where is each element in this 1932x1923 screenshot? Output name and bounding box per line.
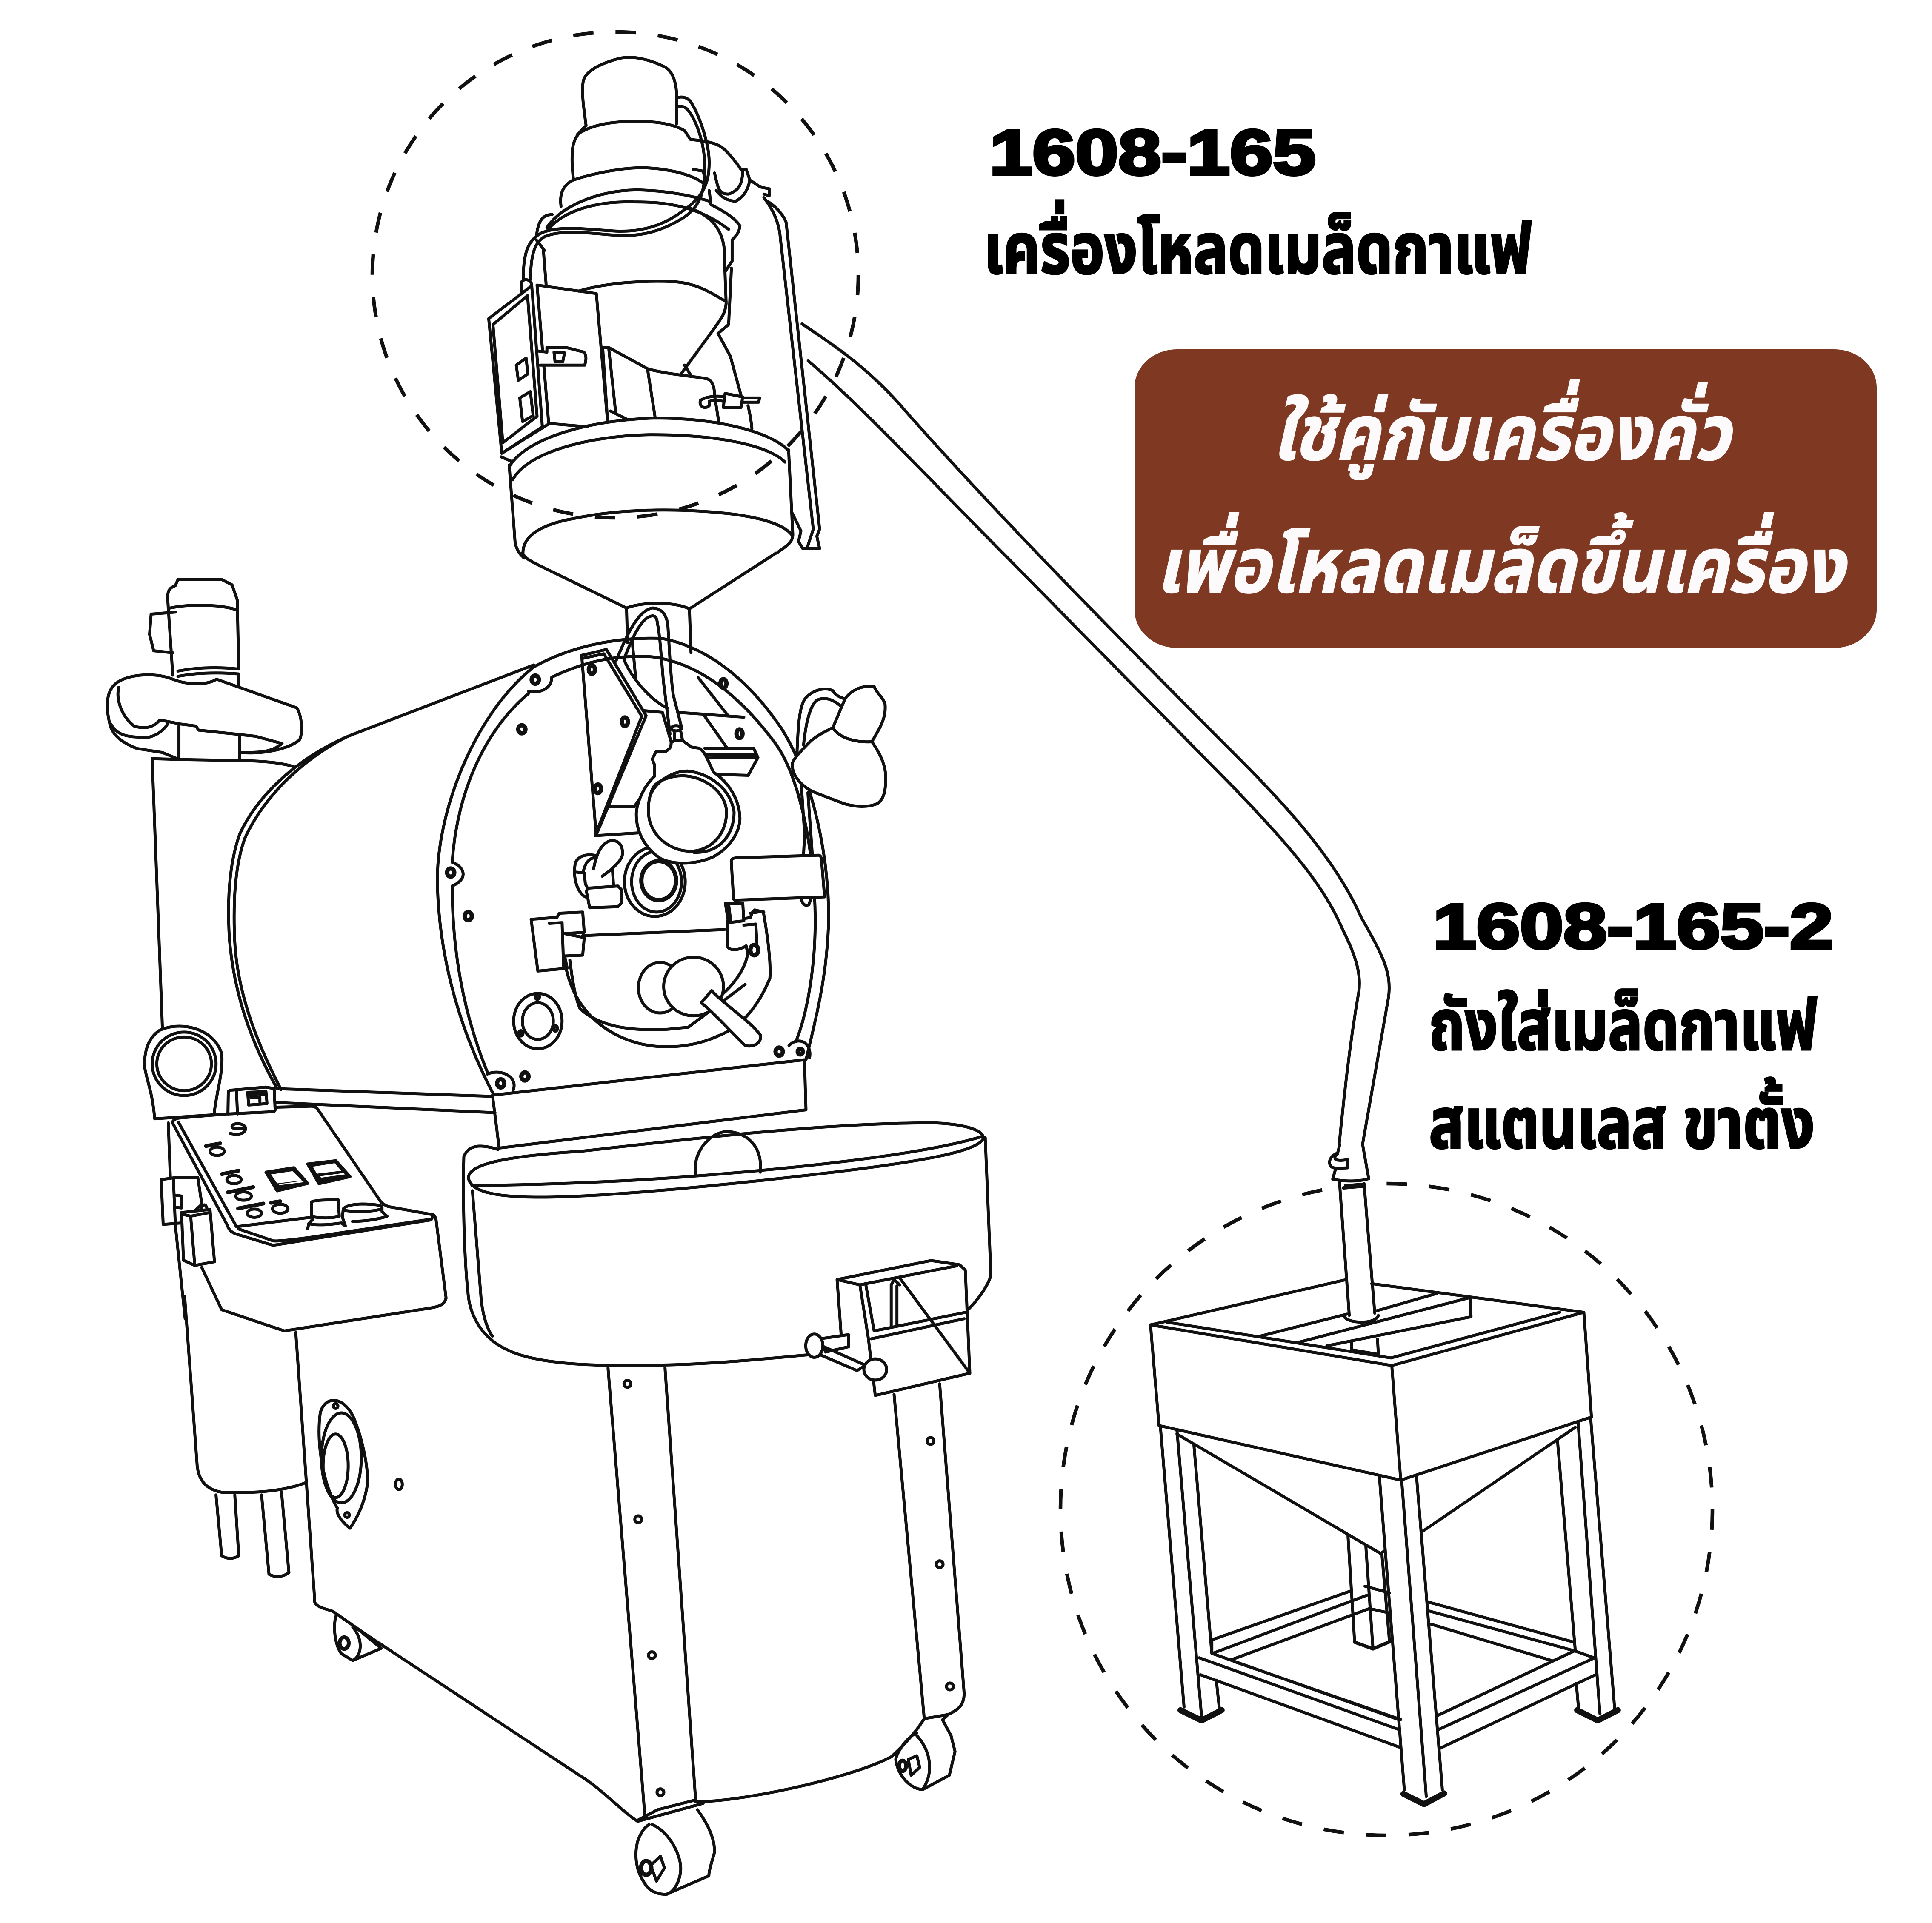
loader motor dome <box>583 57 677 126</box>
heading: loader name: เครื่องโหลดเมล็ดกาแฟ <box>984 200 1532 288</box>
base body <box>296 1332 924 1821</box>
drum back shell <box>229 665 534 1090</box>
control box switches <box>516 358 533 422</box>
rear caster <box>896 1715 955 1789</box>
dashed circle: stand detail <box>1060 1184 1712 1835</box>
tube into tank <box>1339 1181 1378 1322</box>
rear lamp stem <box>801 786 812 905</box>
illustration: bean loader <box>489 57 820 558</box>
rear leg plate <box>894 1384 964 1719</box>
sensor wire loop <box>616 608 682 734</box>
tank opening <box>1151 1280 1584 1358</box>
discharge chute <box>837 1261 970 1395</box>
loader valve knob <box>723 394 760 408</box>
door latch <box>726 903 764 942</box>
front caster <box>636 1800 714 1894</box>
illustration: drum door detail <box>574 608 886 955</box>
panel dials <box>206 1144 288 1218</box>
callout line 1: ใช้คู่กับเครื่องคั่ว <box>1272 380 1733 480</box>
cooling fan motor <box>149 579 239 685</box>
bar bracket <box>228 1087 275 1114</box>
bracket inner <box>237 1092 267 1114</box>
panel oval knob <box>342 1204 387 1221</box>
large viewing port <box>636 740 740 863</box>
screws <box>447 676 803 1087</box>
heading: part number loader: 1608-165 <box>989 117 1316 188</box>
heading: part number tank: 1608-165-2 <box>1433 890 1833 962</box>
illustration: roaster drum <box>107 553 829 1148</box>
chaff collector handle <box>107 675 302 759</box>
round gauge <box>144 1026 222 1119</box>
loader support strap <box>764 197 820 548</box>
loader lower casing <box>603 348 719 422</box>
pipe clamp <box>1329 1144 1369 1181</box>
illustration: machine base and cooling tray <box>185 1123 991 1894</box>
tank box <box>1151 1312 1592 1480</box>
door and latch rail <box>565 911 770 1047</box>
stand legs <box>1160 1417 1615 1797</box>
heading: tank description: สแตนเลส ขาตั้ง <box>1429 1077 1815 1163</box>
rear foot <box>1355 1642 1389 1649</box>
door knobs <box>638 962 682 1013</box>
cable box inner <box>182 1205 210 1265</box>
drum front plate <box>437 638 829 1094</box>
loader funnel rim <box>509 418 793 558</box>
lower frame <box>1199 1586 1596 1748</box>
illustration: bean tank stand <box>1151 1181 1618 1804</box>
sampler lever <box>574 841 623 908</box>
frame column behind panel <box>168 1123 185 1319</box>
stand feet <box>1180 1710 1618 1804</box>
chute handle <box>820 1335 866 1371</box>
loader control box <box>489 280 608 462</box>
middle port <box>624 847 685 916</box>
frame column top <box>152 726 294 1029</box>
loader wire <box>523 97 709 279</box>
control box latch <box>538 348 586 365</box>
plate screws <box>589 665 743 793</box>
vacuum pipe <box>802 324 1389 1179</box>
side box inner <box>173 1179 182 1226</box>
funnel cone and neck <box>523 553 776 653</box>
leg screws <box>333 1381 953 1796</box>
door handle <box>701 990 761 1046</box>
thermometer bracket <box>705 748 758 775</box>
callout line 2: เพื่อโหลดเมล็ดขึ้นเครื่อง <box>1156 513 1847 609</box>
left caster <box>334 1617 381 1661</box>
tube mark <box>1343 1186 1363 1188</box>
left column and pipes <box>185 1296 306 1577</box>
lamp <box>792 686 886 807</box>
control box on plate <box>731 855 825 900</box>
pipe coupling <box>691 140 769 201</box>
front leg plate <box>608 1368 696 1817</box>
panel switch right <box>308 1161 350 1184</box>
callout: usage note <box>1135 349 1877 648</box>
heading: tank name: ถังใส่เมล็ดกาแฟ <box>1429 986 1817 1064</box>
illustration: control panel <box>161 1087 446 1319</box>
door hinge <box>531 912 745 1030</box>
sampler plate <box>582 650 646 836</box>
side box <box>161 1177 202 1224</box>
cooling tray <box>463 1123 991 1366</box>
loader body <box>536 191 752 428</box>
funnel bottom <box>1177 1427 1575 1554</box>
panel number mark <box>230 1124 246 1134</box>
panel switch left <box>266 1168 308 1191</box>
panel housing lower edge <box>202 1267 446 1331</box>
loader tiers <box>547 121 729 229</box>
small round port <box>514 993 562 1049</box>
hopper throat behind plate <box>624 639 744 747</box>
panel outline <box>172 1090 446 1298</box>
side port <box>319 1400 368 1528</box>
panel knob <box>308 1200 346 1229</box>
cable box <box>182 1210 214 1265</box>
drum collar and base bar <box>276 1060 806 1148</box>
dashed circle: loader detail <box>372 32 858 518</box>
tray agitator dome <box>695 1131 760 1175</box>
